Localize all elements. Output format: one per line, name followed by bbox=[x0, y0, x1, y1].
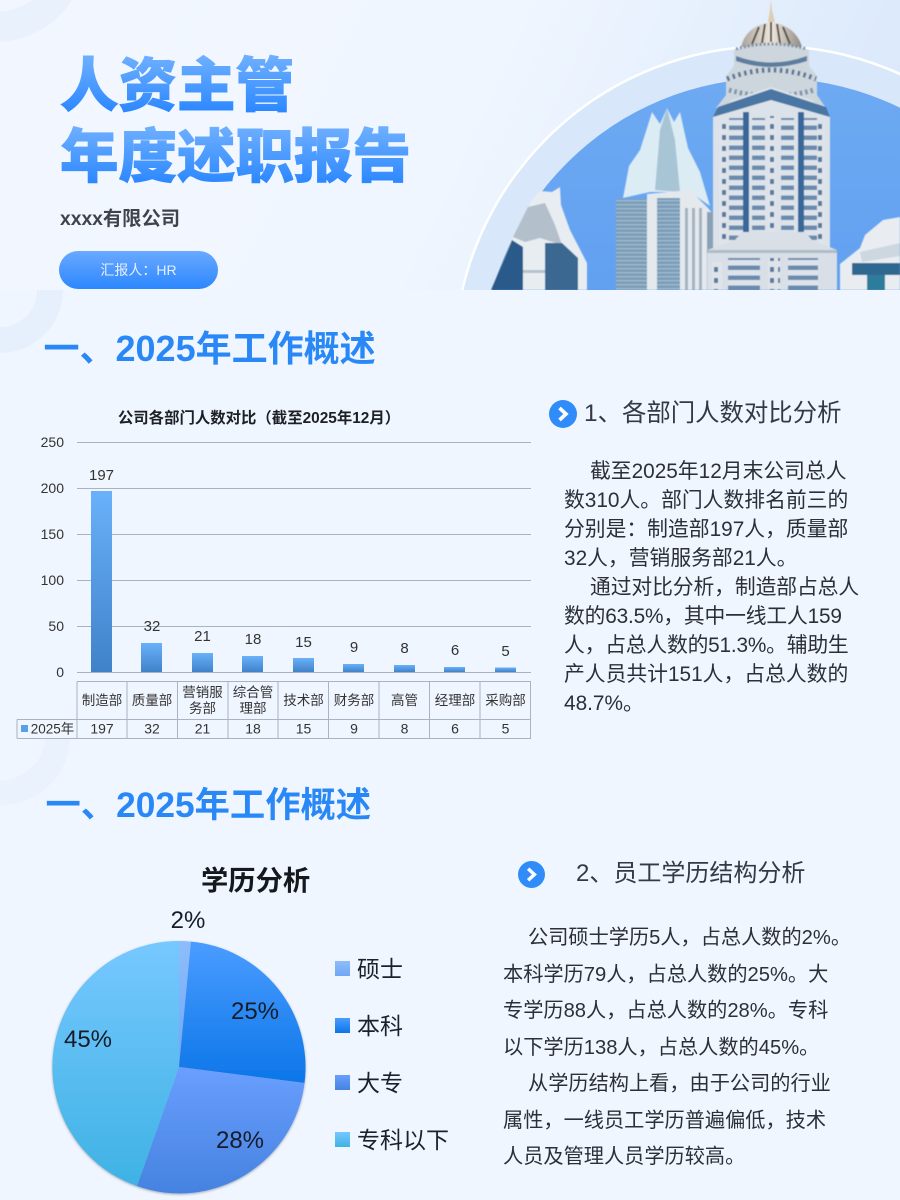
text block: headcount analysis: 48.7%。 bbox=[564, 692, 644, 715]
text block: headcount analysis: 数的63.5%，其中一线工人159 bbox=[564, 605, 842, 628]
icon: chevron badge 2 bbox=[518, 861, 545, 888]
data table: 6 bbox=[451, 720, 459, 736]
pie chart title: 学历分析 bbox=[201, 865, 310, 896]
text block: headcount analysis: 32人，营销服务部21人。 bbox=[564, 547, 797, 570]
text block: headcount analysis: 截至2025年12月末公司总人 bbox=[590, 460, 847, 482]
bar value labels: 5 bbox=[501, 643, 510, 660]
bar value labels: 6 bbox=[451, 642, 459, 659]
text block: education analysis bbox=[503, 926, 851, 1168]
data table: 财务部 bbox=[334, 693, 374, 708]
header background panel bbox=[0, 0, 900, 290]
reporter pill button: 汇报人：HR bbox=[100, 262, 177, 278]
text block: headcount analysis: 产人员共计151人，占总人数的 bbox=[564, 663, 848, 686]
legend bbox=[335, 956, 449, 1153]
y axis labels: 150 bbox=[41, 526, 64, 542]
pie percent labels: 45% bbox=[64, 1026, 112, 1053]
title: 年度述职报告 bbox=[60, 125, 411, 190]
legend: 硕士 bbox=[357, 956, 403, 982]
y axis labels bbox=[41, 434, 64, 680]
title: 人资主管 bbox=[60, 54, 294, 119]
data table: 5 bbox=[502, 720, 510, 736]
bar value labels: 21 bbox=[194, 628, 211, 645]
pie percent labels: 25% bbox=[231, 998, 279, 1025]
building: right tower bbox=[840, 217, 900, 290]
text block: headcount analysis: 分别是：制造部197人，质量部 bbox=[564, 518, 848, 541]
text block: education analysis: 专学历88人，占总人数的28%。专科 bbox=[503, 1000, 828, 1022]
data table: 15 bbox=[296, 720, 311, 736]
slice 硕士 2% bbox=[179, 941, 191, 1067]
section heading 1: 一、2025年工作概述 bbox=[44, 328, 376, 369]
bar value labels: 8 bbox=[400, 640, 409, 657]
data table: 务部 bbox=[189, 701, 216, 716]
section heading 2: 一、2025年工作概述 bbox=[46, 786, 371, 825]
subheading 2: 2、员工学历结构分析 bbox=[576, 860, 805, 887]
arch: blue sky disk bbox=[492, 82, 900, 290]
data table: 32 bbox=[144, 720, 160, 736]
chart title: 公司各部门人数对比（截至2025年12月） bbox=[118, 408, 400, 427]
data table: 197 bbox=[90, 720, 114, 736]
slice 本科 25% bbox=[179, 942, 306, 1083]
legend: 本科 bbox=[357, 1013, 403, 1039]
text block: headcount analysis bbox=[564, 460, 859, 715]
pie percent labels: 2% bbox=[171, 907, 205, 934]
data table: 综合管 bbox=[233, 685, 273, 700]
data table: 9 bbox=[350, 720, 358, 736]
y axis labels: 250 bbox=[41, 434, 64, 450]
bar chart: department headcount bbox=[16, 408, 531, 739]
data table bbox=[17, 682, 531, 738]
title bbox=[60, 54, 411, 190]
data table: 营销服 bbox=[182, 685, 223, 700]
text block: education analysis: 本科学历79人，占总人数的25%。大 bbox=[503, 964, 828, 986]
data table: 制造部 bbox=[82, 693, 122, 708]
bar value labels: 9 bbox=[350, 639, 358, 656]
data table: 21 bbox=[195, 720, 210, 736]
building: left tower bbox=[491, 187, 587, 290]
building: middle tower bbox=[616, 108, 714, 290]
y axis labels: 50 bbox=[48, 618, 64, 634]
legend: 大专 bbox=[357, 1070, 403, 1096]
y axis labels: 100 bbox=[41, 572, 64, 588]
text block: headcount analysis: 数310人。部门人数排名前三的 bbox=[564, 489, 848, 512]
text block: education analysis: 属性，一线员工学历普遍偏低，技术 bbox=[503, 1110, 826, 1132]
pie percent labels bbox=[64, 907, 279, 1154]
y axis labels: 200 bbox=[41, 480, 64, 496]
reporter pill button bbox=[59, 251, 218, 289]
bar value labels: 32 bbox=[144, 618, 160, 635]
building: main tower with dome bbox=[707, 0, 837, 290]
pie percent labels: 28% bbox=[216, 1127, 264, 1154]
data table: 采购部 bbox=[485, 693, 526, 708]
text block: education analysis: 人员及管理人员学历较高。 bbox=[503, 1146, 745, 1168]
text block: education analysis: 以下学历138人，占总人数的45%。 bbox=[503, 1036, 819, 1058]
icon: chevron badge 1 bbox=[549, 400, 577, 428]
text block: headcount analysis: 人，占总人数的51.3%。辅助生 bbox=[564, 634, 849, 657]
text block: headcount analysis: 通过对比分析，制造部占总人 bbox=[590, 576, 859, 599]
company name: xxxx有限公司 bbox=[60, 209, 180, 230]
pie chart: education bbox=[51, 907, 449, 1196]
bar value labels: 197 bbox=[89, 467, 114, 484]
data table: 18 bbox=[245, 720, 261, 736]
data table: 质量部 bbox=[132, 693, 172, 708]
decorative soft rings bbox=[0, 0, 72, 353]
data table: 技术部 bbox=[283, 693, 324, 708]
text block: education analysis: 从学历结构上看，由于公司的行业 bbox=[528, 1073, 831, 1095]
data table: 高管 bbox=[391, 692, 418, 708]
data table: 经理部 bbox=[435, 693, 475, 708]
subheading 1: 1、各部门人数对比分析 bbox=[584, 400, 841, 427]
y axis labels: 0 bbox=[56, 664, 64, 680]
data table: 2025年 bbox=[31, 722, 74, 736]
bars bbox=[91, 491, 516, 672]
illustration: city skyline in arch bbox=[461, 1, 900, 290]
data table: 理部 bbox=[240, 701, 266, 716]
legend: 专科以下 bbox=[357, 1127, 449, 1153]
arch: outer light band with white outline bbox=[461, 46, 900, 290]
text block: education analysis: 公司硕士学历5人，占总人数的2%。 bbox=[528, 927, 851, 949]
bar value labels: 15 bbox=[295, 634, 312, 651]
data table: 8 bbox=[401, 720, 409, 736]
slice 专科以下 45% bbox=[52, 941, 179, 1186]
slice 大专 28% bbox=[137, 1067, 304, 1193]
bar value labels bbox=[89, 467, 510, 660]
bar value labels: 18 bbox=[245, 631, 261, 648]
